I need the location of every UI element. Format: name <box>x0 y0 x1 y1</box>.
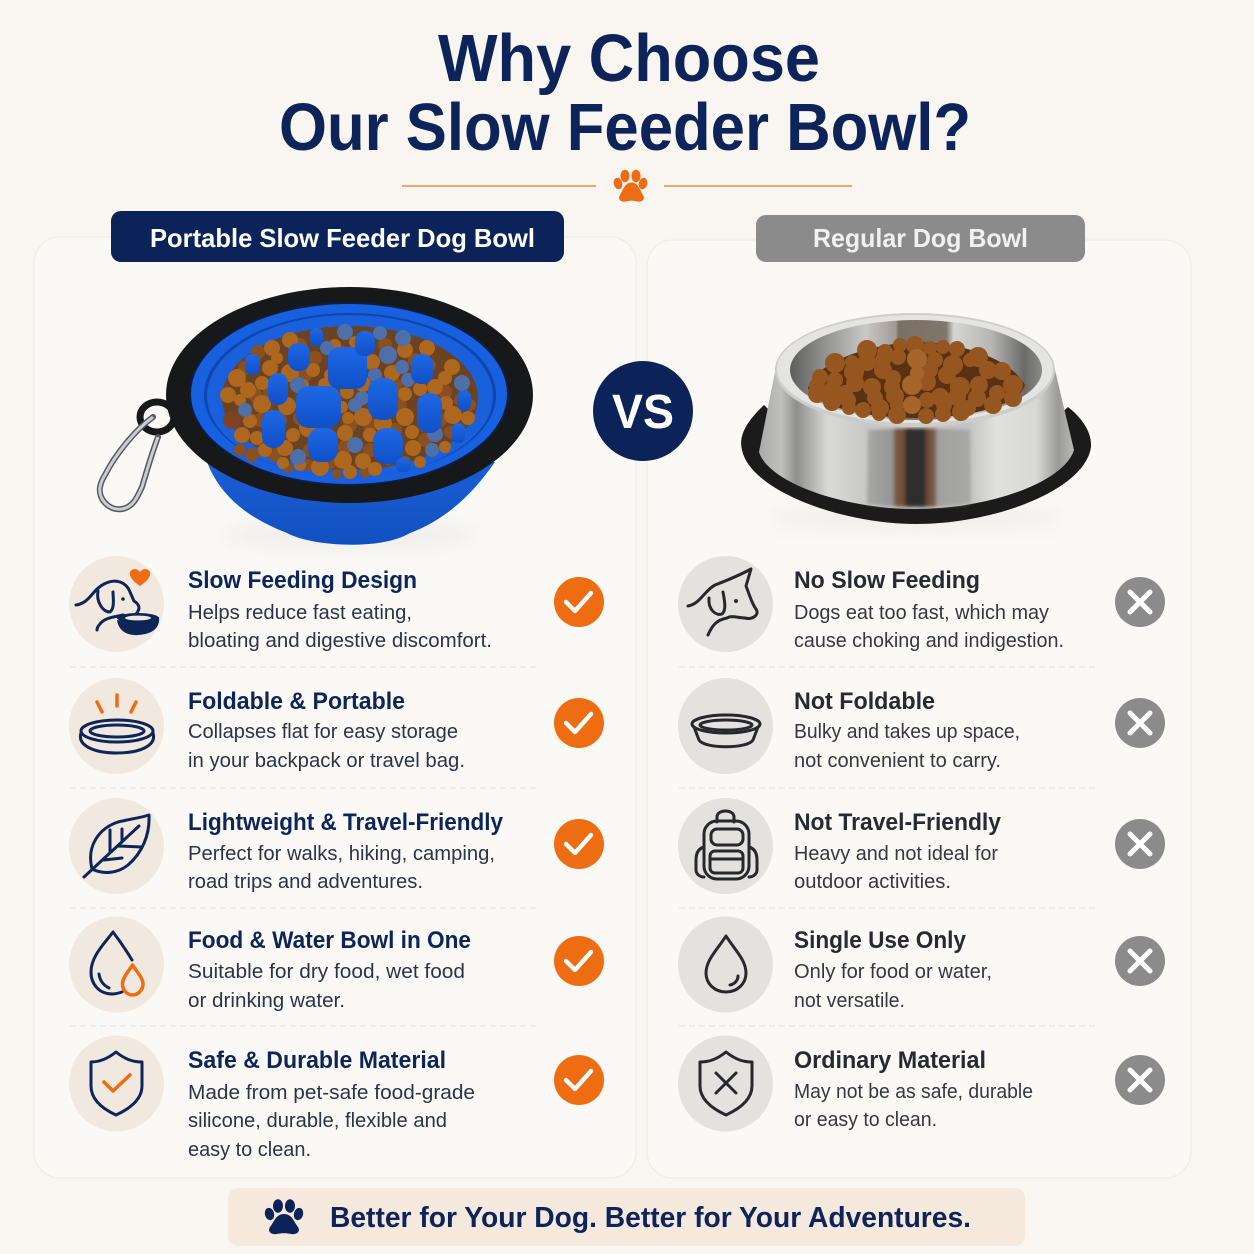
icon: backpack <box>678 798 773 894</box>
footer text: Better for Your Dog. Better for Your Adventures. <box>330 1202 971 1234</box>
text: in your backpack or travel bag. <box>188 750 465 772</box>
icon: gray cross <box>1115 577 1165 627</box>
left row 1: slow feeding design <box>69 556 604 652</box>
text: May not be as safe, durable <box>794 1081 1033 1103</box>
icon: paw <box>263 1199 305 1234</box>
right row 5: ordinary material <box>678 1036 1165 1132</box>
text <box>794 567 1064 652</box>
left row 3: lightweight <box>69 798 604 894</box>
icon: gray cross <box>1115 819 1165 869</box>
text: or drinking water. <box>188 990 345 1012</box>
icon: orange check <box>554 1055 604 1105</box>
title divider with paw <box>402 170 852 202</box>
text: Made from pet-safe food-grade <box>188 1082 475 1104</box>
text <box>794 809 1002 893</box>
icon: orange check <box>554 698 604 748</box>
text: Food & Water Bowl in One <box>188 927 471 954</box>
text: or easy to clean. <box>794 1109 937 1131</box>
text: Slow Feeding Design <box>188 567 417 594</box>
text: cause choking and indigestion. <box>794 630 1064 652</box>
text: Not Foldable <box>794 688 935 715</box>
text <box>188 688 465 772</box>
icon: orange check <box>554 819 604 869</box>
icon: shield with check <box>69 1036 164 1132</box>
illustration: blue collapsible slow feeder bowl <box>100 287 533 547</box>
text: Helps reduce fast eating, <box>188 602 412 624</box>
text: silicone, durable, flexible and <box>188 1110 447 1132</box>
right row 2: not foldable <box>678 678 1165 774</box>
text: not convenient to carry. <box>794 750 1001 772</box>
text <box>188 1047 475 1161</box>
heading pill: portable slow feeder dog bowl <box>111 211 564 262</box>
footer banner <box>228 1188 1025 1246</box>
title <box>279 21 971 165</box>
text: Bulky and takes up space, <box>794 721 1020 743</box>
right row 1: no slow feeding <box>678 556 1165 652</box>
text: Suitable for dry food, wet food <box>188 961 465 983</box>
text: No Slow Feeding <box>794 567 980 594</box>
text: Not Travel-Friendly <box>794 809 1002 836</box>
text: Single Use Only <box>794 927 967 954</box>
kibble <box>220 332 475 479</box>
kibble mound <box>808 342 1025 418</box>
row dividers <box>70 667 1097 1026</box>
text <box>188 809 504 893</box>
icon: water drop <box>678 916 773 1012</box>
text: bloating and digestive discomfort. <box>188 630 492 652</box>
text <box>794 927 992 1012</box>
icon: water drops <box>69 916 164 1012</box>
text: Dogs eat too fast, which may <box>794 602 1049 624</box>
text: Perfect for walks, hiking, camping, <box>188 843 495 865</box>
text: Safe & Durable Material <box>188 1047 446 1074</box>
heading pill: regular dog bowl: Regular Dog Bowl <box>813 223 1028 253</box>
illustration: stainless steel bowl <box>741 313 1091 528</box>
text: Collapses flat for easy storage <box>188 721 458 743</box>
left row 4: food and water <box>69 916 604 1012</box>
text: Only for food or water, <box>794 961 992 983</box>
left row 2: foldable and portable <box>69 678 604 774</box>
text: outdoor activities. <box>794 871 951 893</box>
text: easy to clean. <box>188 1139 311 1161</box>
VS badge <box>593 361 693 461</box>
text: Lightweight & Travel-Friendly <box>188 809 504 836</box>
right row 3: not travel friendly <box>678 798 1165 894</box>
text <box>794 688 1020 772</box>
panel: portable slow feeder <box>34 237 636 1178</box>
icon: gray cross <box>1115 1055 1165 1105</box>
right row 4: single use only <box>678 916 1165 1012</box>
icon: orange check <box>554 936 604 986</box>
icon: shield with cross <box>678 1036 773 1132</box>
left row 5: safe and durable <box>69 1036 604 1161</box>
text: Ordinary Material <box>794 1047 986 1074</box>
text: road trips and adventures. <box>188 871 423 893</box>
title: Why Choose <box>438 21 820 96</box>
icon: leaf <box>69 798 164 894</box>
icon: gray cross <box>1115 936 1165 986</box>
icon: dog head <box>678 556 773 652</box>
text: not versatile. <box>794 990 905 1012</box>
carabiner clip <box>100 402 174 509</box>
icon: dog eating with heart <box>69 556 164 652</box>
VS badge: VS <box>612 386 674 439</box>
text <box>188 927 471 1012</box>
icon: orange check <box>554 577 604 627</box>
heading pill: regular dog bowl <box>756 215 1085 262</box>
panel: regular dog bowl <box>647 240 1191 1178</box>
feeder posts <box>245 328 471 472</box>
heading pill: portable slow feeder dog bowl: Portable Slow Feeder Dog Bowl <box>150 223 535 253</box>
text: Foldable & Portable <box>188 688 405 715</box>
text <box>794 1047 1033 1131</box>
text: Heavy and not ideal for <box>794 843 998 865</box>
icon: gray cross <box>1115 698 1165 748</box>
title: Our Slow Feeder Bowl? <box>279 90 971 165</box>
kibble filler <box>234 338 476 479</box>
icon: plain bowl <box>678 678 773 774</box>
icon: collapsed bowl <box>69 678 164 774</box>
text <box>188 567 492 652</box>
